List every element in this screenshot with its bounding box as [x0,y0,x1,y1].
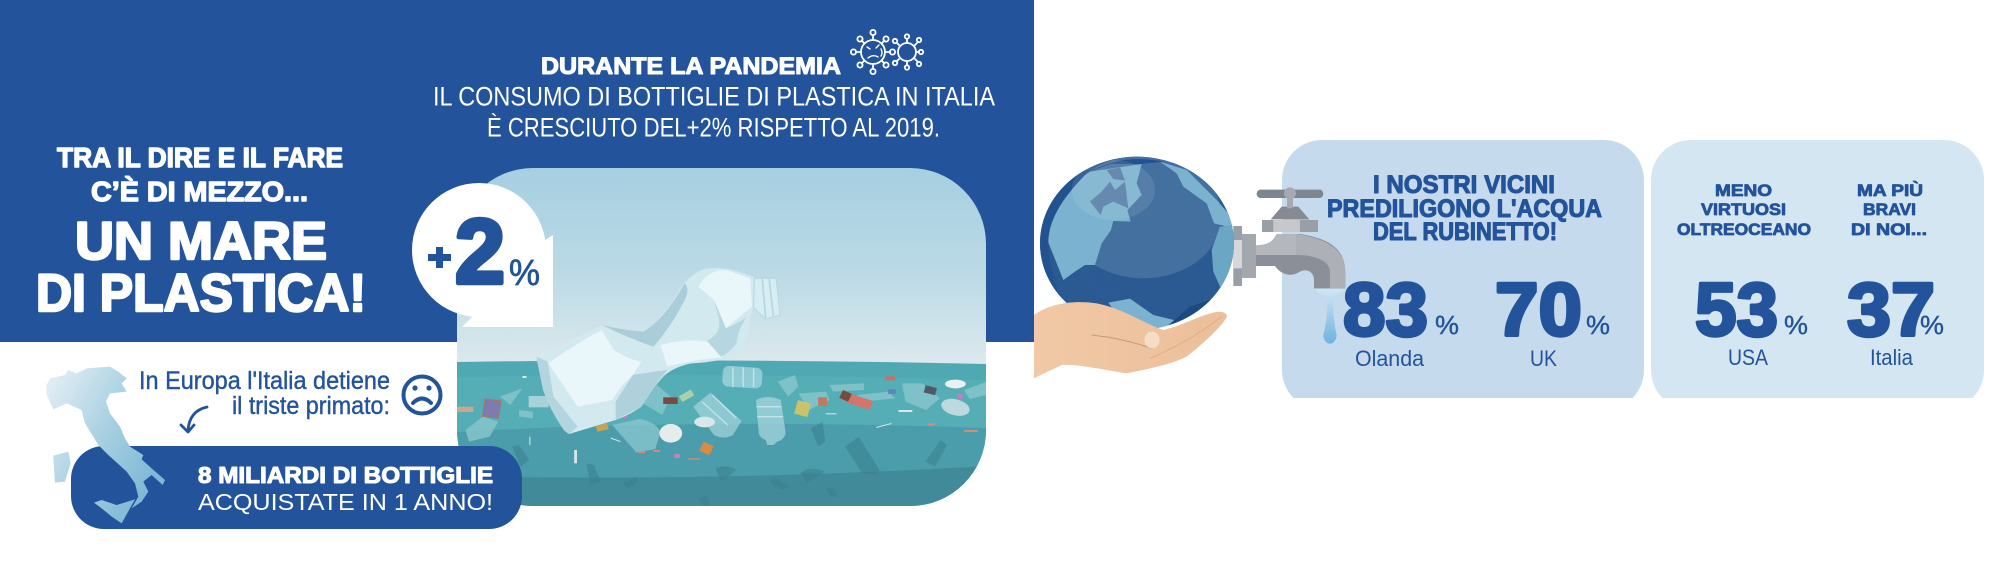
icon: virus cells [851,30,923,74]
dark rim shading [1040,170,1086,296]
panel heading: DEL RUBINETTO! [1373,218,1557,246]
title: un mare di plastica: C’È DI MEZZO... [91,176,308,207]
stat: Olanda 83%: 83 [1343,268,1428,352]
heading: ma più bravi: MA PIÙ [1857,181,1923,200]
floating plastic debris [457,366,986,478]
title: un mare di plastica: UN MARE [75,212,327,271]
heading: ma più bravi: BRAVI [1863,201,1916,219]
stat: UK 70%: UK [1530,346,1557,371]
panel heading: PREDILIGONO L'ACQUA [1327,195,1602,223]
big number 2: 2 [455,201,505,303]
blue header band [0,0,1034,342]
stat: UK 70%: 70 [1495,268,1582,352]
icon: crumpled plastic bottle [536,268,780,434]
arrow: curved down [181,407,207,432]
percent sign: % [509,252,540,293]
stat: USA 53%: % [1784,310,1808,340]
title: un mare di plastica: TRA IL DIRE E IL FARE [57,142,343,173]
heading: meno virtuosi: MENO [1715,182,1772,200]
stat: Olanda 83%: % [1435,310,1459,340]
panel: neighbours tap water [1282,140,1644,410]
Sicily [94,499,135,523]
panel heading: I NOSTRI VICINI [1373,171,1555,199]
heading: meno virtuosi [1677,182,1811,239]
heading: ma più bravi: DI NOI... [1851,221,1927,239]
title: un mare di plastica: DI PLASTICA! [36,264,366,323]
callout: 8 billion bottles pill: ACQUISTATE IN 1 ANNO! [198,489,493,515]
sea water layers [457,360,986,510]
text: Italy sad record [139,367,390,420]
stat: USA 53%: 53 [1695,268,1778,352]
stat: USA 53%: USA [1728,345,1768,370]
earth [1037,153,1240,333]
title: un mare di plastica [36,142,366,323]
faucet [1233,187,1345,288]
text: Italy sad record: In Europa l'Italia detiene [139,367,390,395]
South America [1108,298,1174,328]
stat: Italia 37%: % [1920,310,1944,340]
stat: USA 53% [1695,268,1808,370]
sky [457,168,986,364]
stat: Olanda 83%: Olanda [1355,346,1425,371]
heading: pandemic statement [433,53,995,142]
map: Italy [47,367,165,523]
panel: overseas comparison [1651,140,1984,410]
Sardinia [53,452,71,483]
North America [1047,164,1142,280]
stat: Italia 37%: Italia [1870,345,1914,370]
heading: ma più bravi [1851,181,1927,239]
heading: pandemic statement: DURANTE LA PANDEMIA [541,53,841,80]
plus sign [428,247,451,268]
Africa [1212,225,1234,288]
hand [1034,302,1227,378]
light sheen [1072,160,1155,220]
panel: polluted sea illustration [457,168,987,510]
icon: globe held in hand with tap [1034,153,1345,378]
stat: Italia 37%: 37 [1847,268,1935,352]
callout: 8 billion bottles pill [71,446,522,529]
stat: UK 70% [1495,268,1610,371]
panel heading [1327,171,1602,246]
callout: +2% speech bubble [412,183,553,327]
heading: pandemic statement: È CRESCIUTO DEL+2% RISPETTO AL 2019. [487,112,940,142]
pill text: 8 MILIARDI DI BOTTIGLIE [198,462,493,488]
heading: pandemic statement: IL CONSUMO DI BOTTIGLIE DI PLASTICA IN ITALIA [433,82,995,112]
stat: UK 70%: % [1586,310,1610,340]
icon: sad face [404,376,440,414]
heading: meno virtuosi: OLTREOCEANO [1677,221,1811,239]
water drop [1315,289,1345,344]
stat: Olanda 83% [1343,268,1459,371]
text: Italy sad record: il triste primato: [232,392,390,420]
Greenland and Europe strip [1160,162,1234,227]
Caribbean [1076,271,1077,272]
heading: meno virtuosi: VIRTUOSI [1701,201,1786,219]
